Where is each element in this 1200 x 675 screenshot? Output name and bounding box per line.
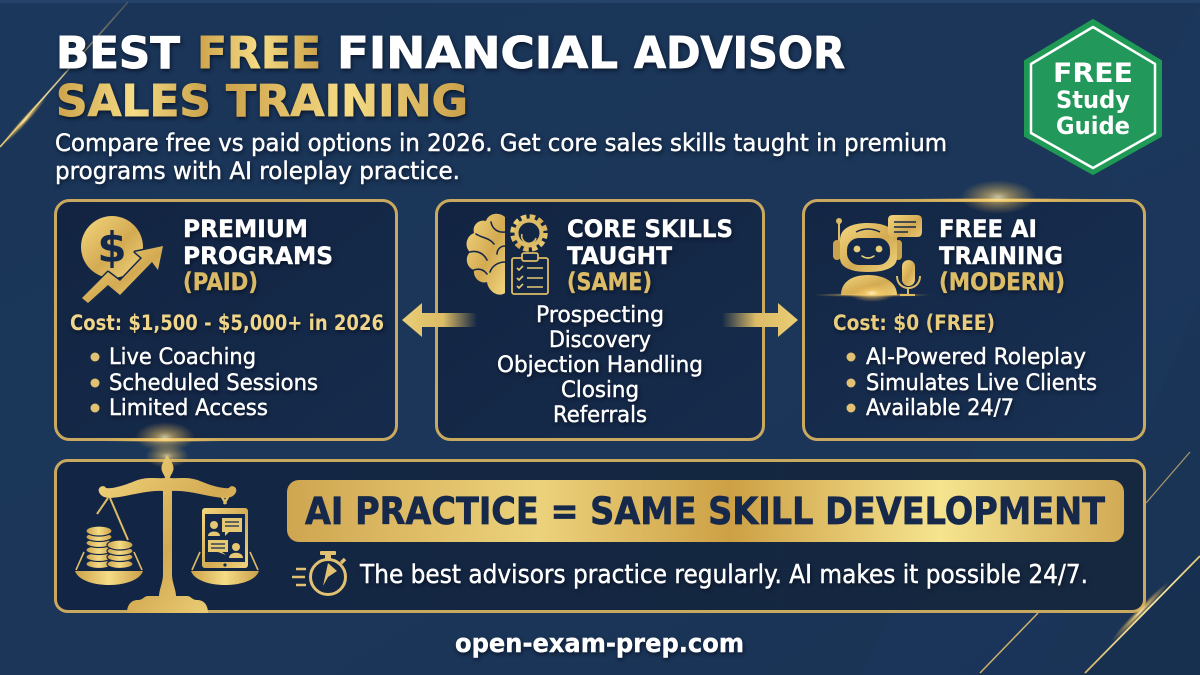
title: FREE xyxy=(197,28,321,79)
bullet list: Available 24/7 xyxy=(866,396,1014,421)
callout banner xyxy=(287,480,1124,542)
bullet list: Scheduled Sessions xyxy=(109,371,318,396)
bullet list xyxy=(846,345,1097,421)
title: SALES xyxy=(56,76,211,127)
glow: free AI panel top edge xyxy=(888,180,1108,214)
panel heading xyxy=(183,215,333,296)
title: FINANCIAL xyxy=(337,28,618,79)
skills list: Objection Handling xyxy=(497,353,703,378)
panel heading: CORE SKILLS xyxy=(567,215,733,243)
cost: Cost: $0 (FREE) xyxy=(833,311,995,335)
skills list: Referrals xyxy=(553,403,647,428)
glow: lower right streak xyxy=(1108,579,1172,645)
panel: free AI training xyxy=(804,200,1144,440)
website footer: open-exam-prep.com xyxy=(455,629,744,659)
title: BEST xyxy=(56,28,180,79)
bullet list: AI-Powered Roleplay xyxy=(866,345,1086,370)
panel heading: (SAME) xyxy=(567,268,652,296)
icon: brain, gear and checklist xyxy=(467,214,548,295)
badge: free study guide: Study xyxy=(1056,86,1130,114)
panel: bottom takeaway xyxy=(56,444,1144,613)
panel heading xyxy=(567,215,733,296)
skills list: Closing xyxy=(561,378,639,403)
bullet list: Live Coaching xyxy=(109,345,256,370)
arrow: core skills to premium xyxy=(402,303,477,337)
panel heading: TRAINING xyxy=(939,242,1063,270)
panel heading xyxy=(939,215,1065,296)
panel: premium programs xyxy=(56,200,396,440)
title: ADVISOR xyxy=(634,28,845,79)
subtitle: programs with AI roleplay practice. xyxy=(55,157,460,185)
panel heading: PROGRAMS xyxy=(183,242,333,270)
subtitle: Compare free vs paid options in 2026. Get core sales skills taught in premium xyxy=(55,129,947,157)
icon: robot with speech bubble and microphone xyxy=(812,215,932,302)
badge: free study guide xyxy=(1025,20,1161,174)
panel heading: (MODERN) xyxy=(939,268,1065,296)
decorative gold streak: upper left xyxy=(0,2,128,148)
panel: core skills taught xyxy=(436,200,764,440)
icon: stopwatch xyxy=(292,551,346,594)
icon: dollar coin with rising arrow: $ xyxy=(97,223,127,272)
icon: balance scale with coins and tablet xyxy=(75,444,259,613)
panel heading: PREMIUM xyxy=(183,215,308,243)
panel heading: FREE AI xyxy=(939,215,1037,243)
takeaway text: The best advisors practice regularly. AI makes it possible 24/7. xyxy=(359,560,1088,590)
icon: dollar coin with rising arrow xyxy=(81,216,163,303)
skills list: Prospecting xyxy=(536,303,664,328)
skills list: Discovery xyxy=(549,328,651,353)
arrow: core skills to free AI xyxy=(722,303,798,337)
bullet list: Simulates Live Clients xyxy=(866,371,1097,396)
badge: free study guide: FREE xyxy=(1053,58,1133,89)
decorative gold streaks: lower right xyxy=(980,452,1200,673)
callout banner: AI PRACTICE = SAME SKILL DEVELOPMENT xyxy=(305,490,1106,533)
cost: Cost: $1,500 - $5,000+ in 2026 xyxy=(70,311,384,335)
skills list xyxy=(497,303,703,428)
badge: free study guide: Guide xyxy=(1056,112,1130,140)
panel heading: (PAID) xyxy=(183,268,258,296)
bullet list xyxy=(90,345,318,421)
panel heading: TAUGHT xyxy=(567,242,673,270)
title xyxy=(56,28,845,127)
glow: premium panel bottom edge xyxy=(95,422,235,452)
bullet list: Limited Access xyxy=(109,396,268,421)
subtitle xyxy=(55,129,947,185)
title: TRAINING xyxy=(226,76,468,127)
